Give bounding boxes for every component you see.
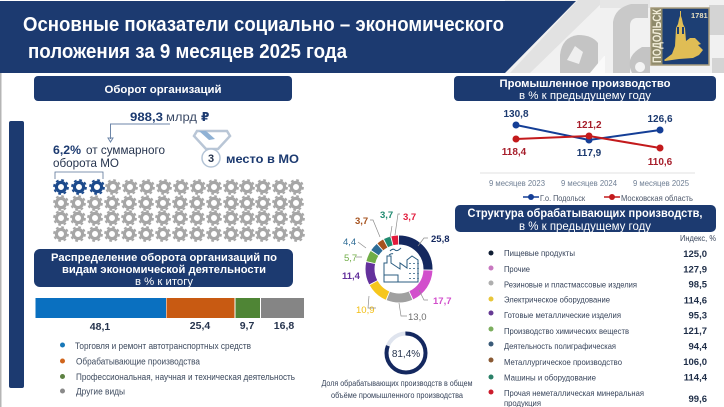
table: manufacturing indexes: Электрическое оборудование [504, 294, 610, 304]
gauge: 81,4%: 81,4% [392, 349, 420, 360]
legend: activity types: Торговля и ремонт автотранспортных средств [75, 341, 251, 351]
donut labels [342, 210, 452, 323]
table: manufacturing indexes: 98,5 [688, 280, 708, 290]
title: положения за 9 месяцев 2025 года [28, 40, 348, 63]
donut labels: 25,8 [431, 234, 450, 245]
table: manufacturing indexes: 106,0 [683, 357, 707, 368]
icon grid: gears [54, 180, 304, 241]
table: manufacturing indexes: Металлургическое производство [504, 357, 622, 367]
line chart: 9 месяцев 2023 [489, 179, 546, 188]
share text: 6,2% [53, 143, 81, 157]
table: manufacturing indexes: Машины и оборудование [504, 372, 596, 382]
left sidebar bar [9, 121, 24, 388]
caption: manufacturing share: Доля обрабатывающих производств в общем [322, 379, 472, 388]
legend: line chart [523, 193, 694, 203]
legend: activity types: Профессиональная, научная и техническая деятельность [76, 372, 295, 382]
table: manufacturing indexes: Прочие [504, 264, 530, 274]
table: manufacturing indexes: Резиновые и пластмассовые изделия [504, 280, 637, 290]
table: manufacturing indexes: 121,7 [683, 326, 707, 337]
panel: manufacturing structure heading: в % к предыдущему году [519, 221, 651, 233]
legend: line chart: Московская область [621, 193, 694, 203]
arrow: turnover to share [108, 124, 170, 142]
turnover value [130, 110, 209, 124]
line chart: 121,2 [576, 120, 602, 131]
line chart: 118,4 [502, 147, 527, 158]
decorative pattern top right [505, 0, 724, 73]
share text [53, 143, 165, 170]
panel: distribution heading: Распределение оборота организаций по [51, 252, 277, 264]
donut labels: 3,7 [355, 216, 368, 227]
donut labels: 3,7 [380, 210, 393, 221]
line chart [480, 109, 695, 203]
donut chart: manufacturing structure [342, 210, 452, 323]
line chart: 130,8 [503, 109, 529, 120]
donut labels: 5,7 [344, 253, 357, 264]
table: manufacturing indexes: 127,9 [683, 264, 707, 276]
table: manufacturing indexes: 125,0 [683, 249, 707, 260]
title: Основные показатели социально – экономического [23, 13, 504, 36]
panel: distribution heading: видам экономической деятельности [62, 264, 266, 276]
caption: manufacturing share [322, 379, 472, 400]
table: manufacturing indexes: 114,6 [684, 296, 707, 306]
table: manufacturing indexes: 94,4 [688, 342, 708, 352]
donut labels: 13,0 [408, 312, 426, 323]
panel: industrial production heading: Промышленное производство [500, 78, 671, 90]
stacked bar chart [36, 298, 304, 333]
icon: factory [384, 248, 418, 282]
rank text: место в МО [226, 152, 299, 166]
table: manufacturing indexes: Готовые металлические изделия [504, 310, 621, 320]
stacked bar chart: 16,8 [274, 320, 294, 332]
panel: distribution heading: в % к итогу [135, 276, 194, 288]
header banner [0, 1, 576, 73]
line chart: 126,6 [647, 114, 673, 125]
donut labels: 10,9 [356, 305, 374, 316]
line chart: 110,6 [648, 157, 673, 168]
line chart: 9 месяцев 2025 [633, 179, 690, 188]
table: manufacturing indexes: Прочая неметаллическая минеральная [504, 388, 644, 398]
turnover value: 988,3 [130, 110, 163, 124]
stacked bar chart: 48,1 [90, 321, 110, 333]
panel: distribution heading [34, 249, 293, 288]
share text: оборота МО [53, 156, 119, 170]
table: manufacturing indexes: Пищевые продукты [504, 248, 575, 258]
legend: line chart: Г.о. Подольск [540, 193, 585, 203]
donut labels: 17,7 [433, 296, 452, 307]
table: manufacturing indexes: 99,6 [688, 394, 707, 405]
share text: от суммарного [86, 143, 165, 157]
donut labels: 11,4 [342, 271, 361, 282]
panel: turnover heading: Оборот организаций [104, 84, 222, 96]
legend: activity types: Обрабатывающие производства [76, 356, 200, 366]
table: manufacturing indexes: Производство химических веществ [504, 326, 629, 336]
turnover value: млрд [166, 110, 197, 124]
icon: Podolsk emblem: 1781 [691, 11, 708, 20]
donut labels: 4,4 [343, 237, 356, 248]
line chart: 9 месяцев 2024 [561, 179, 618, 188]
table: manufacturing indexes: Индекс, % [680, 234, 716, 243]
donut labels: 3,7 [403, 212, 416, 223]
table: manufacturing indexes: 114,4 [684, 372, 708, 384]
panel: manufacturing structure heading: Структура обрабатывающих производств, [468, 208, 702, 220]
legend: activity types: Другие виды [76, 386, 125, 396]
table: manufacturing indexes: 95,3 [688, 310, 707, 322]
line chart: 117,9 [577, 148, 602, 159]
icon: Podolsk emblem [651, 8, 709, 65]
stacked bar chart: 25,4 [190, 320, 210, 332]
panel: industrial production heading: в % к предыдущему году [519, 90, 652, 102]
turnover value: ₽ [201, 110, 209, 124]
caption: manufacturing share: объёме промышленного производства [331, 391, 464, 400]
title [23, 13, 504, 63]
panel: manufacturing structure heading [455, 205, 716, 233]
bracket over gears [55, 172, 103, 179]
table: manufacturing indexes [488, 234, 716, 407]
icon: medal: 3 [208, 153, 214, 165]
legend: activity types [60, 341, 295, 396]
stacked bar chart: 9,7 [240, 320, 254, 332]
panel: industrial production heading [454, 76, 716, 102]
gauge: 81,4% [386, 334, 426, 372]
panel: turnover heading [34, 76, 292, 101]
icon: medal [194, 131, 230, 167]
table: manufacturing indexes: Деятельность полиграфическая [504, 341, 616, 351]
